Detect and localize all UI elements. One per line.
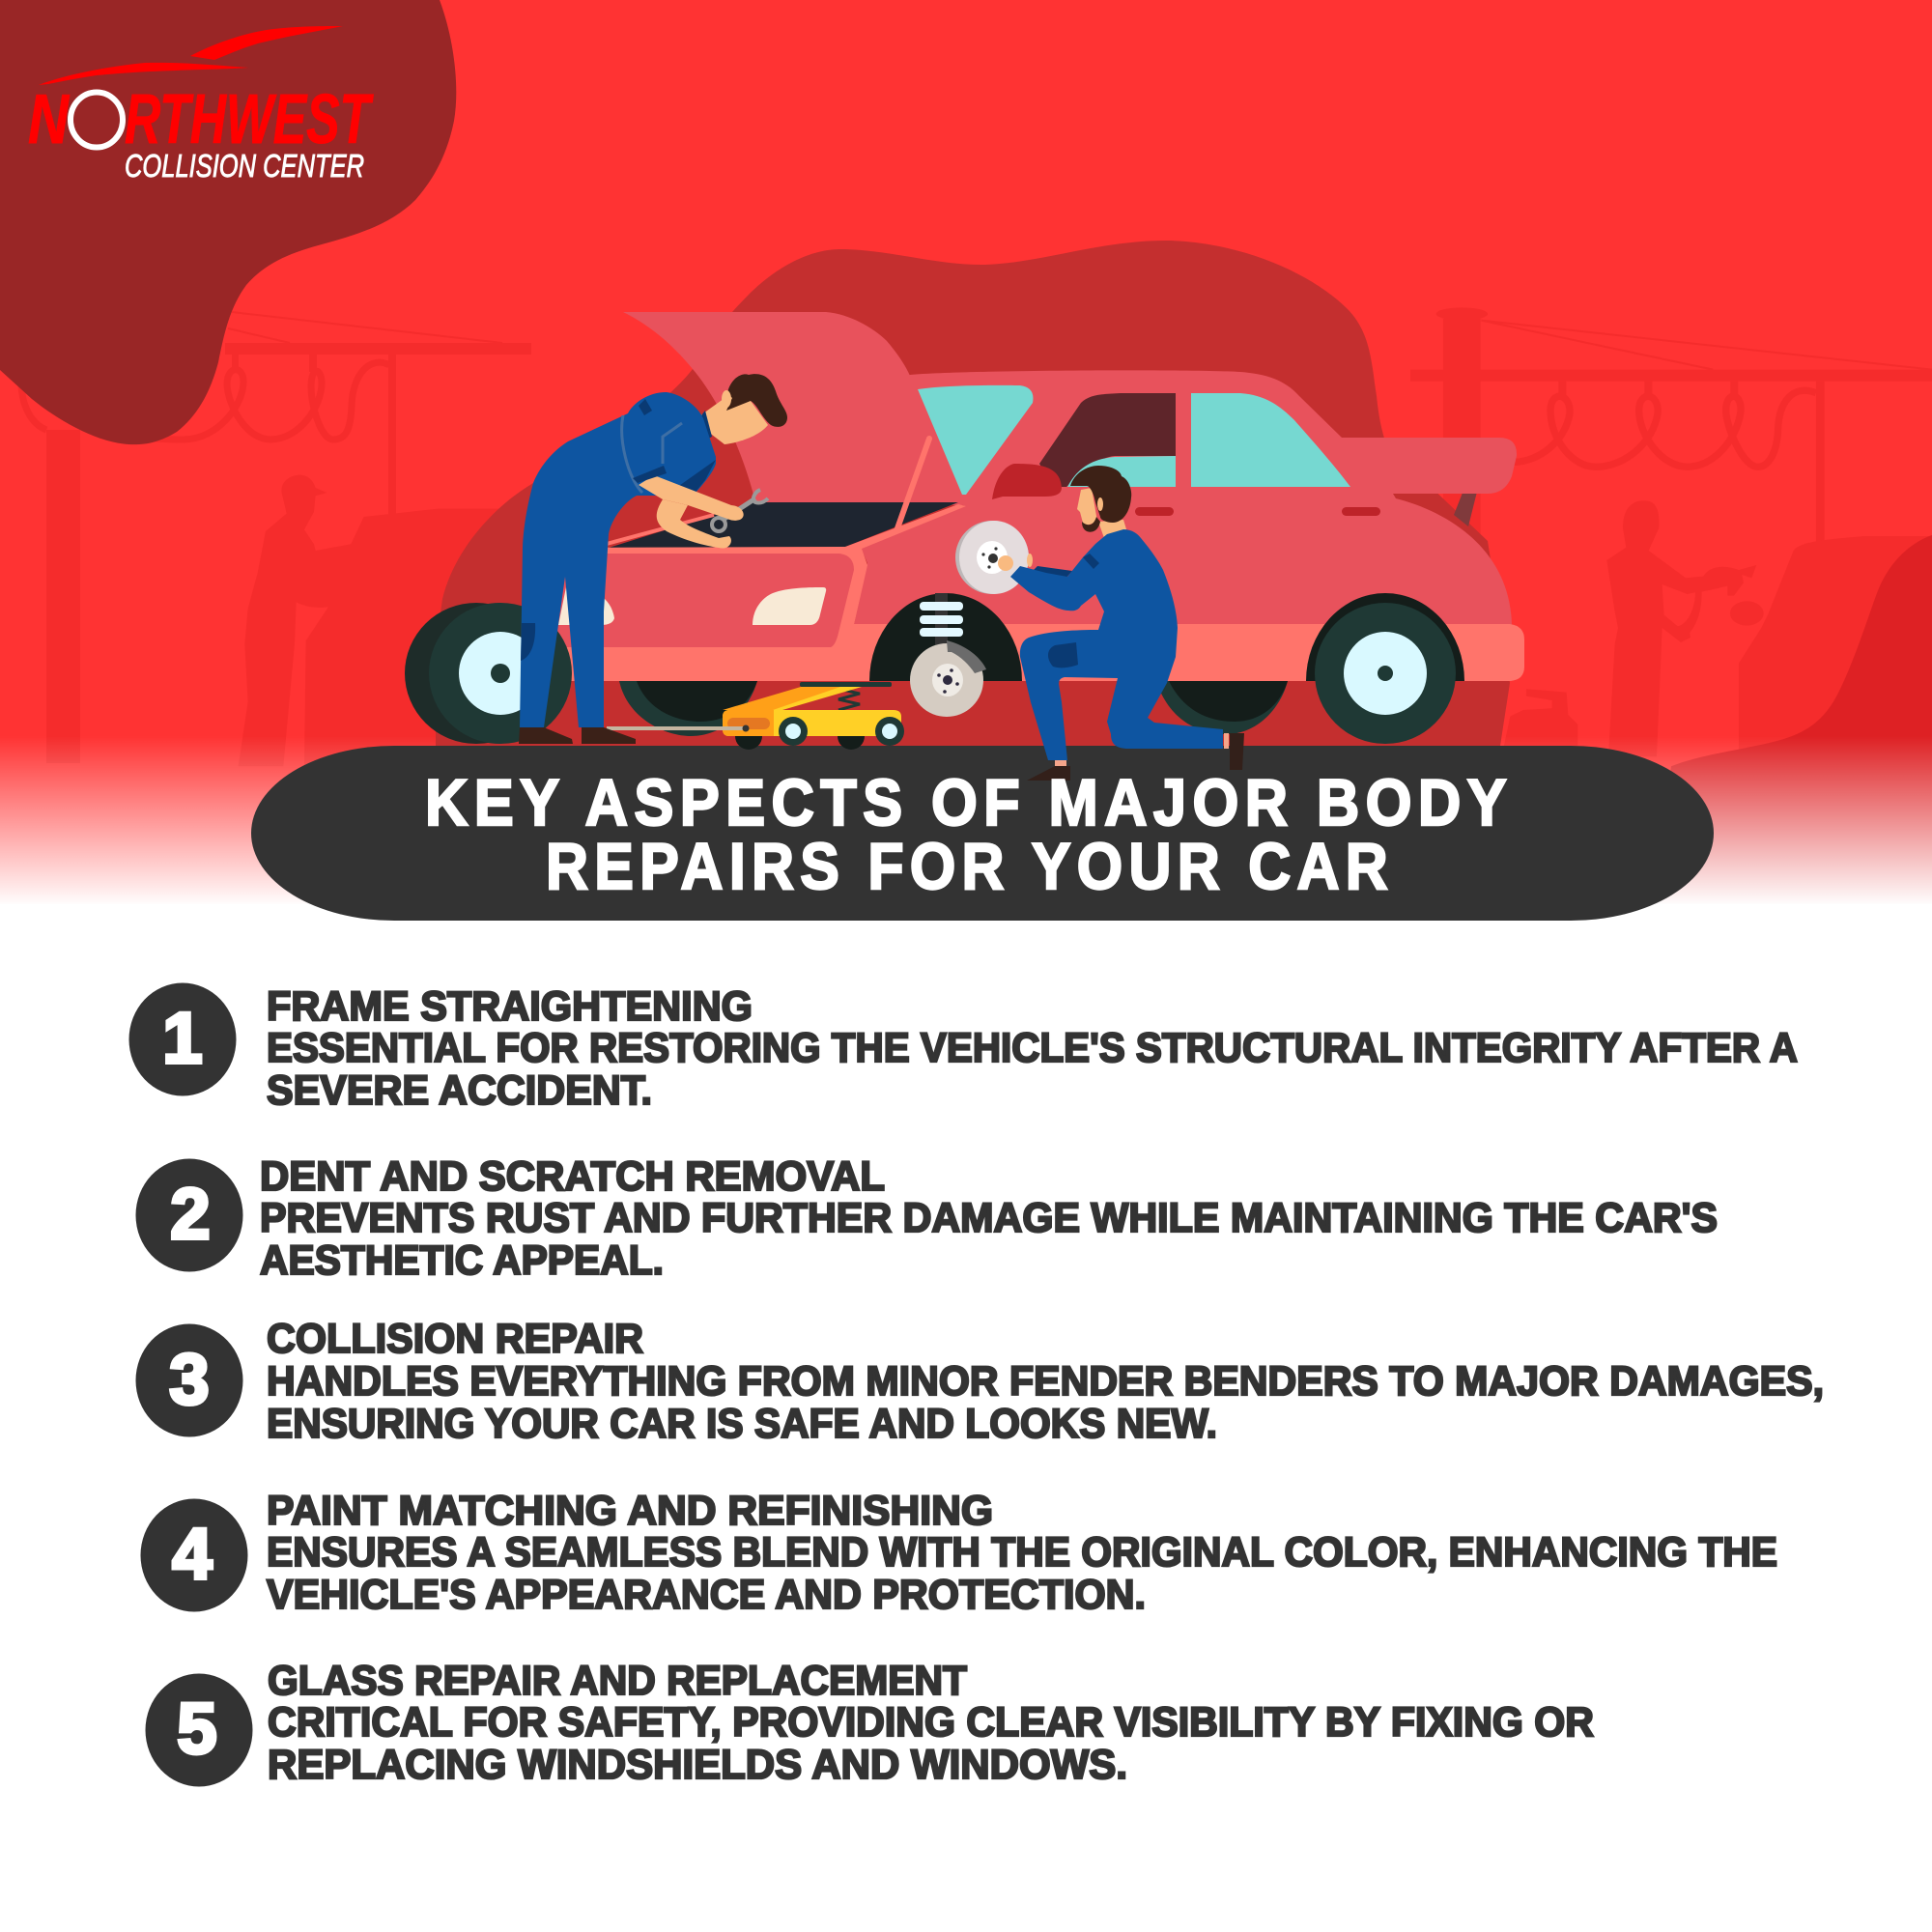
item 5: glass repair and replacement [145, 1658, 1594, 1788]
door handles [1135, 507, 1380, 516]
badge 1 [129, 983, 236, 1095]
right dark red wave [1655, 535, 1932, 908]
right side window [1191, 393, 1350, 487]
badge 3 [135, 1323, 243, 1437]
ear [1097, 497, 1103, 511]
item 2 text [260, 1153, 1718, 1284]
windshield [918, 385, 1033, 495]
item 3 text: COLLISION REPAIR [267, 1316, 643, 1362]
item 2 text: AESTHETIC APPEAL. [260, 1237, 664, 1284]
shirt seams [622, 415, 682, 493]
item 5 text: CRITICAL FOR SAFETY, PROVIDING CLEAR VISIBILITY BY FIXING OR [268, 1699, 1594, 1746]
spoiler strut [1454, 488, 1478, 526]
shoulder patch [639, 399, 652, 415]
title line 1: KEY ASPECTS OF MAJOR BODY [425, 766, 1513, 839]
badge 5 [145, 1673, 253, 1787]
main title [425, 766, 1513, 903]
item 5 text: REPLACING WINDSHIELDS AND WINDOWS. [268, 1742, 1127, 1788]
item 1 text: ESSENTIAL FOR RESTORING THE VEHICLE'S STRUCTURAL INTEGRITY AFTER A [267, 1025, 1798, 1071]
number 4: 4 [172, 1514, 213, 1594]
pocket [521, 623, 535, 661]
head [696, 396, 768, 444]
sleeve band [633, 466, 667, 483]
item 3 text: HANDLES EVERYTHING FROM MINOR FENDER BENDERS TO MAJOR DAMAGES, [267, 1358, 1824, 1405]
number 3: 3 [169, 1339, 210, 1419]
item 1 text: SEVERE ACCIDENT. [267, 1067, 652, 1114]
rear dark window [1039, 393, 1176, 487]
item 4 text [267, 1488, 1777, 1618]
arm shadow [676, 460, 716, 496]
logo ring [71, 93, 123, 147]
number 2: 2 [170, 1174, 211, 1254]
front fender rim [541, 504, 966, 681]
logo letter N: N [28, 81, 71, 158]
side mirror [992, 464, 1062, 499]
item 4 text: ENSURES A SEAMLESS BLEND WITH THE ORIGINAL COLOR, ENHANCING THE [267, 1529, 1777, 1576]
item 1: frame straightening [129, 983, 1798, 1114]
item 3 text [267, 1316, 1824, 1447]
rear wheel [1315, 603, 1456, 744]
beard [1082, 517, 1100, 532]
item 3 text: ENSURING YOUR CAR IS SAFE AND LOOKS NEW. [267, 1401, 1217, 1447]
jack base [723, 710, 901, 736]
raised hood [623, 312, 958, 502]
brake disc on car [910, 640, 986, 717]
hair [1070, 466, 1131, 523]
jack rear wheels [735, 723, 865, 750]
car body [755, 370, 1517, 681]
rear wheel arch [1306, 593, 1464, 681]
badge 4 [141, 1499, 247, 1611]
left garage silhouette [21, 312, 531, 766]
jack wheels [779, 717, 904, 746]
hood support rod [897, 439, 929, 528]
wrench [712, 490, 768, 531]
engine bay [609, 502, 958, 548]
upper arm [639, 475, 744, 521]
title pill [251, 746, 1714, 921]
front wheel arch [869, 593, 1022, 681]
jack arm [723, 687, 861, 710]
socks [1055, 733, 1229, 766]
logo: Northwest Collision Center [28, 26, 374, 184]
overalls [520, 392, 716, 727]
hair [726, 374, 787, 427]
white base below fade [0, 904, 1932, 923]
lower forearm [657, 499, 731, 549]
item 4: paint matching and refinishing [141, 1488, 1777, 1618]
kneeling mechanic with brake disc [955, 466, 1244, 781]
item 1 text: FRAME STRAIGHTENING [267, 983, 753, 1030]
far headlight [558, 587, 614, 625]
logo wordmark: RTHWEST [125, 81, 374, 158]
hood edge line [607, 515, 714, 544]
item 2 text: PREVENTS RUST AND FURTHER DAMAGE WHILE MAINTAINING THE CAR'S [260, 1195, 1718, 1241]
shoes [519, 727, 636, 744]
front headlight [753, 587, 826, 625]
logo swooshes [39, 26, 343, 85]
neck [1098, 520, 1126, 538]
far sleeve [1034, 566, 1072, 579]
right garage silhouette [1410, 307, 1932, 756]
shoulder band [1083, 554, 1099, 569]
number 5: 5 [177, 1689, 217, 1769]
title line 2: REPAIRS FOR YOUR CAR [546, 830, 1394, 903]
jack top plate [800, 682, 892, 687]
white fade overlay [0, 736, 1932, 906]
side skirt bumper [854, 624, 1524, 681]
front wheel [405, 603, 572, 744]
far wheels under car [619, 681, 1288, 736]
badge 2 [135, 1159, 243, 1271]
item 5 text: GLASS REPAIR AND REPLACEMENT [268, 1658, 967, 1704]
overalls [1010, 529, 1223, 760]
dark red blob behind car [436, 241, 1510, 746]
suspension spring [920, 593, 963, 644]
item 4 text: PAINT MATCHING AND REFINISHING [267, 1488, 993, 1534]
face [1077, 488, 1097, 526]
item 3: collision repair [135, 1316, 1824, 1447]
ear [722, 390, 731, 408]
front panel [541, 554, 854, 647]
side window glass [1067, 456, 1176, 487]
jack handle [607, 726, 747, 730]
item 2: dent and scratch removal [135, 1153, 1718, 1284]
neck collar [694, 411, 712, 441]
logo subtitle: COLLISION CENTER [125, 148, 364, 184]
knee pocket [1048, 642, 1078, 668]
item 5 text [268, 1658, 1594, 1788]
hands [998, 554, 1033, 571]
top-left logo blob [0, 0, 456, 444]
red car [405, 312, 1524, 744]
far wheel shadows [637, 681, 1288, 722]
item 2 text: DENT AND SCRATCH REMOVAL [260, 1153, 885, 1200]
boots [1027, 733, 1244, 781]
mechanic with wrench [519, 374, 787, 744]
held brake disc [955, 521, 1029, 594]
red hero background [0, 0, 1932, 906]
item 1 text [267, 983, 1798, 1114]
item 4 text: VEHICLE'S APPEARANCE AND PROTECTION. [267, 1572, 1146, 1618]
number 1: 1 [162, 998, 203, 1078]
jack spring [838, 689, 860, 710]
scissor jack [607, 682, 904, 750]
